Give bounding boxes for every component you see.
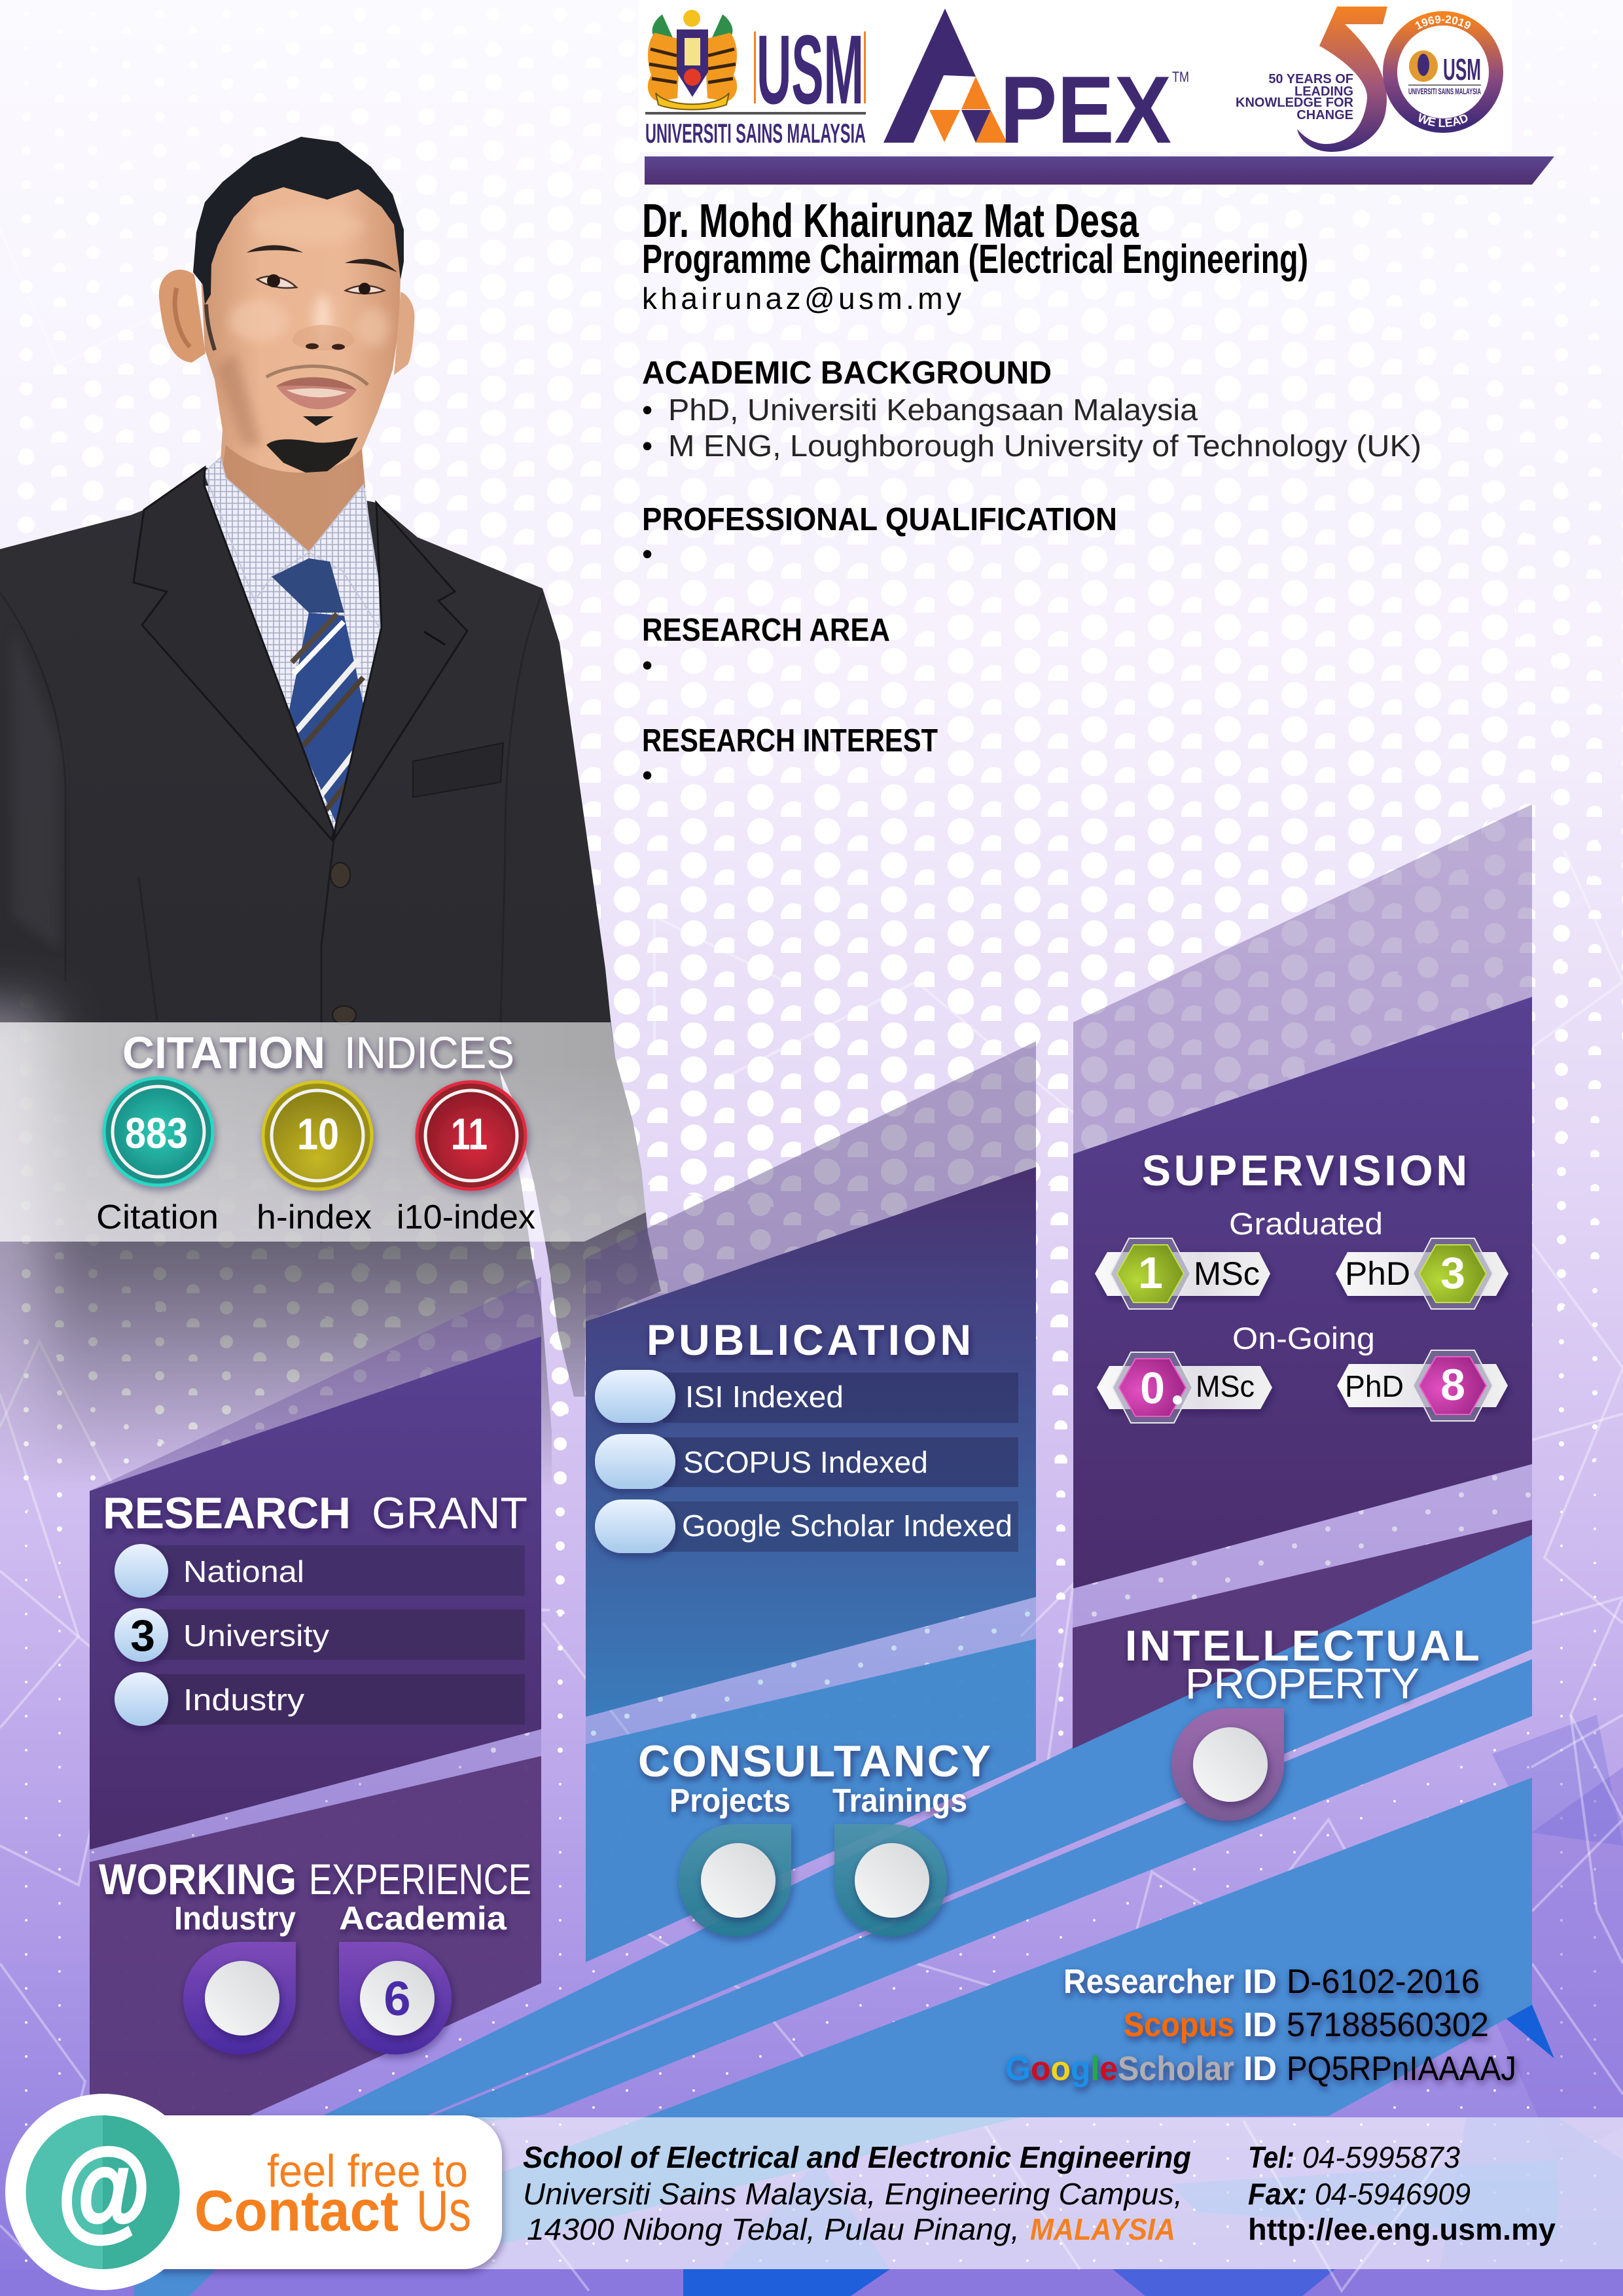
heading: GRANT [372, 1488, 527, 1538]
row: ISI: ISI Indexed [685, 1380, 844, 1414]
profile text block [642, 195, 1421, 792]
mini USM mark: UNIVERSITI SAINS MALAYSIA [1408, 86, 1481, 96]
professional qualification: PROFESSIONAL QUALIFICATION [642, 502, 1117, 537]
badge: graduated PhD [1336, 1238, 1508, 1309]
researcher id: Researcher [1063, 1963, 1234, 2001]
drop: trainings [834, 1824, 947, 1937]
address: Universiti Sains Malaysia, Engineering Campus, [523, 2177, 1183, 2211]
heading: INTELLECTUAL [1125, 1621, 1480, 1670]
contact tagline: Contact [194, 2178, 399, 2243]
contact tagline [194, 2145, 471, 2243]
neck shadow [221, 445, 365, 555]
mini USM mark: USM [1443, 52, 1481, 86]
row: Google Scholar [595, 1499, 1018, 1553]
row: university [115, 1608, 525, 1662]
sleeve highlight [18, 668, 54, 937]
sleeve shading [0, 592, 543, 1069]
row: industry: Industry [183, 1683, 304, 1717]
badge: citation: 883 [125, 1109, 188, 1157]
face highlights [216, 207, 389, 445]
lapels [134, 467, 467, 840]
logo backdrop [638, 0, 1512, 152]
heading: EXPERIENCE [309, 1855, 531, 1903]
research interest: • [642, 758, 652, 792]
panel body [90, 1756, 541, 2116]
strip [1073, 1464, 1532, 1628]
row: SCOPUS [595, 1434, 1018, 1489]
address: 14300 Nibong Tebal, Pulau Pinang, [527, 2212, 1020, 2246]
backing [586, 1041, 1036, 1321]
phone, fax and web: Fax: [1248, 2177, 1307, 2211]
drop: academia [339, 1942, 452, 2054]
backing [1073, 804, 1532, 1154]
APEX logo [883, 9, 1189, 163]
academic background: • [642, 429, 652, 463]
contact tagline: Us [416, 2178, 471, 2243]
academic background [642, 355, 1421, 463]
badge: h-index [263, 1082, 372, 1189]
badge: graduated MSc: 1 [1138, 1248, 1163, 1298]
labels: h-index [257, 1198, 372, 1236]
heading: INDICES [344, 1028, 514, 1078]
ears [159, 270, 414, 375]
ring numeral 0 [1390, 18, 1496, 126]
USM logo [645, 10, 866, 149]
tagline [1236, 72, 1354, 122]
USM wordmark: USM [757, 14, 864, 124]
email: khairunaz@usm.my [642, 281, 961, 315]
labels [96, 1198, 535, 1236]
banner [0, 1022, 646, 1242]
subheads: Trainings [832, 1782, 967, 1819]
row: national [115, 1544, 525, 1598]
collar [204, 457, 382, 628]
heading: CITATION [122, 1028, 325, 1078]
ring dates: 1969-2019 [1415, 16, 1471, 30]
subheads [174, 1900, 507, 1937]
academic background: PhD, Universiti Kebangsaan Malaysia [668, 393, 1198, 427]
researcher id: D-6102-2016 [1287, 1963, 1480, 2001]
google scholar id: Google [1005, 2050, 1118, 2088]
strip [90, 1729, 541, 1862]
academic background: ACADEMIC BACKGROUND [642, 355, 1052, 391]
drop: IP count [1171, 1708, 1284, 1821]
academic background: • [642, 393, 652, 427]
row: SCOPUS: SCOPUS Indexed [683, 1445, 928, 1479]
neck and face skin [201, 157, 401, 555]
badge: on-going MSc [1097, 1352, 1272, 1423]
moustache [266, 366, 368, 385]
row: university: 3 [130, 1611, 155, 1660]
badge: on-going MSc: MSc [1196, 1369, 1255, 1403]
scopus id: ID [1243, 2006, 1277, 2044]
badge: graduated MSc [1095, 1238, 1270, 1309]
badge: on-going PhD [1337, 1350, 1508, 1421]
panel body [586, 1167, 1036, 1717]
drop: industry [183, 1942, 296, 2054]
tagline: KNOWLEDGE FOR [1236, 96, 1354, 110]
row: ISI [595, 1370, 1018, 1423]
row: industry [115, 1672, 525, 1726]
icon: at sign: @ [58, 2126, 151, 2251]
researcher identifiers [1005, 1963, 1516, 2088]
badge: citation [104, 1078, 213, 1185]
sideburn [206, 304, 215, 350]
breast pocket [413, 743, 503, 797]
suit [0, 467, 661, 1505]
research area: • [642, 648, 652, 682]
backing [90, 1277, 541, 1491]
heading: PROPERTY [1185, 1659, 1419, 1708]
goatee [266, 416, 358, 473]
heading: CONSULTANCY [638, 1736, 991, 1786]
APEX logo: TM [1172, 69, 1189, 85]
lapel buttonhole [424, 632, 445, 645]
role: Programme Chairman (Electrical Engineering) [642, 237, 1308, 282]
panel: citation indices [0, 1022, 646, 1242]
panel: intellectual property [1073, 1464, 1532, 1821]
google scholar id: Scholar [1118, 2050, 1234, 2088]
phone, fax and web [1248, 2140, 1556, 2246]
mouth [276, 377, 357, 409]
row: national: National [183, 1554, 304, 1588]
academic background: M ENG, Loughborough University of Technology (UK) [668, 429, 1421, 463]
panel: supervision [1073, 804, 1532, 1588]
panel: consultancy [586, 1597, 1036, 1962]
heading: SUPERVISION [1142, 1146, 1467, 1194]
tie [272, 558, 367, 828]
heading [1125, 1621, 1480, 1708]
hair [193, 137, 404, 304]
badge: graduated PhD: PhD [1345, 1255, 1410, 1292]
panel body [1073, 1520, 1532, 1749]
heading [99, 1855, 531, 1903]
heading [122, 1028, 514, 1078]
panel: publication [586, 1041, 1036, 1717]
panel: working experience [90, 1729, 541, 2116]
row: university: University [183, 1619, 329, 1653]
panel: research grant [90, 1277, 541, 1850]
researcher id [1063, 1963, 1480, 2001]
phone, fax and web: http://ee.eng.usm.my [1248, 2212, 1556, 2246]
scopus id: Scopus [1124, 2006, 1234, 2044]
phone, fax and web: 04-5995873 [1302, 2140, 1460, 2174]
google scholar id: ID [1243, 2050, 1277, 2088]
professional qualification: • [642, 537, 652, 571]
panel body [90, 1336, 541, 1850]
scopus id [1124, 2006, 1489, 2044]
strip [586, 1597, 1036, 1744]
front seam [321, 840, 334, 1244]
nose [293, 325, 355, 351]
drop: academia: 6 [383, 1971, 411, 2026]
eyes [257, 274, 384, 295]
on-going label: On-Going [1232, 1321, 1375, 1355]
badge: on-going MSc: 0 [1140, 1363, 1165, 1413]
numeral 5 [1297, 7, 1387, 152]
research area [642, 613, 890, 682]
heading: PUBLICATION [647, 1316, 971, 1364]
phone, fax and web: 04-5946909 [1315, 2177, 1471, 2211]
buttons [330, 863, 356, 1024]
ring motto: WE LEAD [1419, 113, 1467, 127]
research interest: RESEARCH INTEREST [642, 723, 938, 759]
badge: on-going PhD: PhD [1345, 1369, 1404, 1403]
subheads: Projects [669, 1782, 791, 1819]
header bar [645, 156, 1554, 185]
footer band [327, 2117, 1623, 2269]
badge: on-going PhD: 8 [1440, 1360, 1465, 1410]
row: Google Scholar: Google Scholar Indexed [682, 1509, 1012, 1543]
brows [247, 245, 397, 272]
panel body [1073, 997, 1532, 1588]
drop: projects [679, 1824, 791, 1937]
address [523, 2140, 1191, 2246]
portrait [0, 137, 661, 1505]
badge: h-index: 10 [297, 1109, 339, 1159]
badge: graduated MSc: MSc [1194, 1255, 1260, 1292]
google scholar id: PQ5RPnIAAAAJ [1287, 2050, 1516, 2088]
badge: graduated PhD: 3 [1440, 1248, 1465, 1298]
panel body [586, 1639, 1036, 1962]
contact tagline: feel free to [267, 2145, 468, 2197]
university name: UNIVERSITI SAINS MALAYSIA [645, 118, 866, 149]
mini USM mark [1408, 50, 1481, 96]
scopus id: 57188560302 [1287, 2006, 1489, 2044]
graduated label: Graduated [1229, 1206, 1383, 1241]
APEX logo: PEX [1000, 56, 1171, 163]
researcher id: ID [1243, 1963, 1277, 2001]
subheads [669, 1782, 967, 1819]
shirt [202, 486, 382, 838]
blue ribbons [157, 1532, 1532, 2245]
subheads: Industry [174, 1900, 296, 1937]
research area: RESEARCH AREA [642, 613, 890, 648]
labels: i10-index [397, 1198, 535, 1236]
badge: i10-index: 11 [451, 1109, 488, 1159]
professional qualification [642, 502, 1117, 571]
tagline: LEADING [1294, 84, 1353, 99]
subheads: Academia [339, 1900, 507, 1937]
USM wordmark [754, 14, 866, 124]
heading: RESEARCH [103, 1488, 351, 1538]
tagline: 50 YEARS OF [1268, 72, 1353, 86]
name: Dr. Mohd Khairunaz Mat Desa [642, 195, 1139, 247]
address: School of Electrical and Electronic Engineering [523, 2140, 1191, 2174]
icon: at sign [5, 2094, 202, 2290]
panel: contact footer [5, 2094, 1623, 2290]
badge: i10-index [417, 1082, 526, 1189]
heading [103, 1488, 527, 1538]
address: MALAYSIA [1030, 2212, 1175, 2246]
USM 50 years logo [1236, 7, 1503, 152]
icon: USM crest [648, 10, 737, 110]
labels: Citation [96, 1198, 219, 1236]
contact pill [157, 2115, 502, 2269]
heading: WORKING [99, 1855, 296, 1903]
tagline: CHANGE [1296, 108, 1353, 122]
research interest [642, 723, 938, 792]
phone, fax and web: Tel: [1248, 2140, 1294, 2174]
google scholar id [1005, 2050, 1516, 2088]
